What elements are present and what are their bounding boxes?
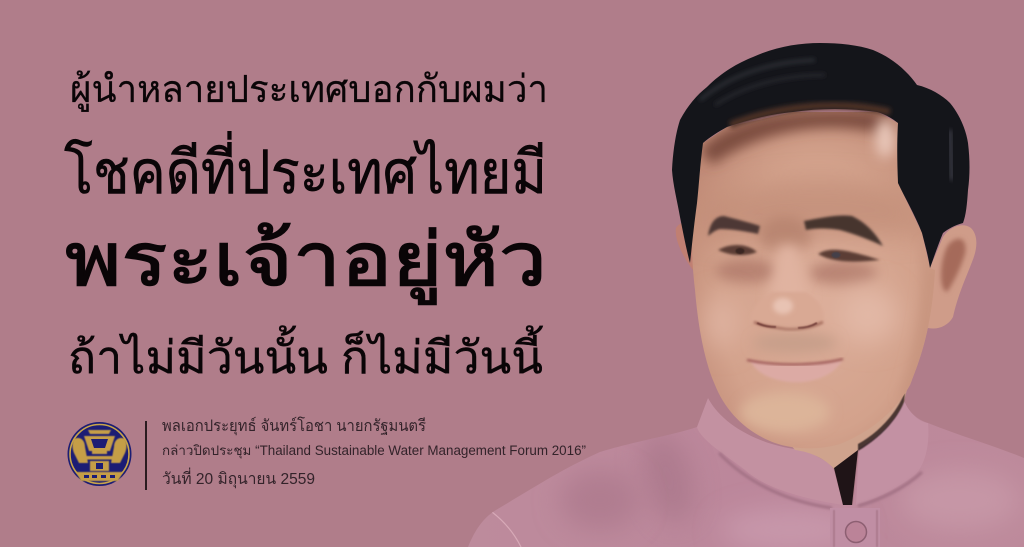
under-eye shadow right: [809, 261, 877, 285]
nose shadow: [754, 322, 823, 329]
placket: [830, 508, 880, 547]
eyebrow left: [708, 216, 760, 236]
cheek highlights: [838, 287, 898, 343]
urn: [84, 436, 115, 451]
collar opening: [834, 450, 858, 505]
eye left: [718, 245, 757, 255]
under-eye shadow left: [715, 259, 779, 283]
speaker name: พลเอกประยุทธ์ จันทร์โอชา นายกรัฐมนตรี: [162, 416, 426, 436]
portrait: [468, 43, 1024, 547]
headline line 2: โชคดีที่ประเทศไทยมี: [64, 131, 547, 206]
forehead shading: [700, 110, 895, 165]
lion left: [72, 438, 88, 463]
button: [846, 522, 866, 542]
divider: [145, 421, 147, 490]
face: [692, 110, 940, 448]
chin glow: [740, 392, 830, 432]
eyebrow right: [804, 215, 883, 246]
attribution text: [162, 416, 586, 489]
headline line 3: พระเจ้าอยู่หัว: [65, 218, 547, 305]
headline line 4: ถ้าไม่มีวันนั้น ก็ไม่มีวันนี้: [68, 325, 543, 383]
event line: กล่าวปิดประชุม “Thailand Sustainable Water Management Forum 2016”: [162, 443, 586, 459]
forehead highlight: [875, 118, 895, 158]
icon: government seal: [68, 422, 132, 486]
lion right: [111, 438, 126, 463]
headline line 1: ผู้นำหลายประเทศบอกกับผมว่า: [70, 69, 548, 112]
neck: [770, 385, 908, 470]
nose wings: [776, 293, 806, 299]
jacket: [468, 398, 1024, 547]
brow bridge shading: [759, 217, 811, 253]
philtrum area: [753, 333, 837, 353]
headline quote: [64, 69, 548, 383]
date line: วันที่ 20 มิถุนายน 2559: [162, 467, 315, 489]
collar: [697, 399, 840, 496]
mouth: [747, 359, 843, 382]
nose bridge: [768, 240, 802, 292]
ear: right: [928, 225, 976, 329]
hair: [672, 43, 970, 268]
right face shadow: [922, 327, 923, 330]
ear: left: [676, 223, 697, 275]
eye right: [818, 250, 880, 262]
